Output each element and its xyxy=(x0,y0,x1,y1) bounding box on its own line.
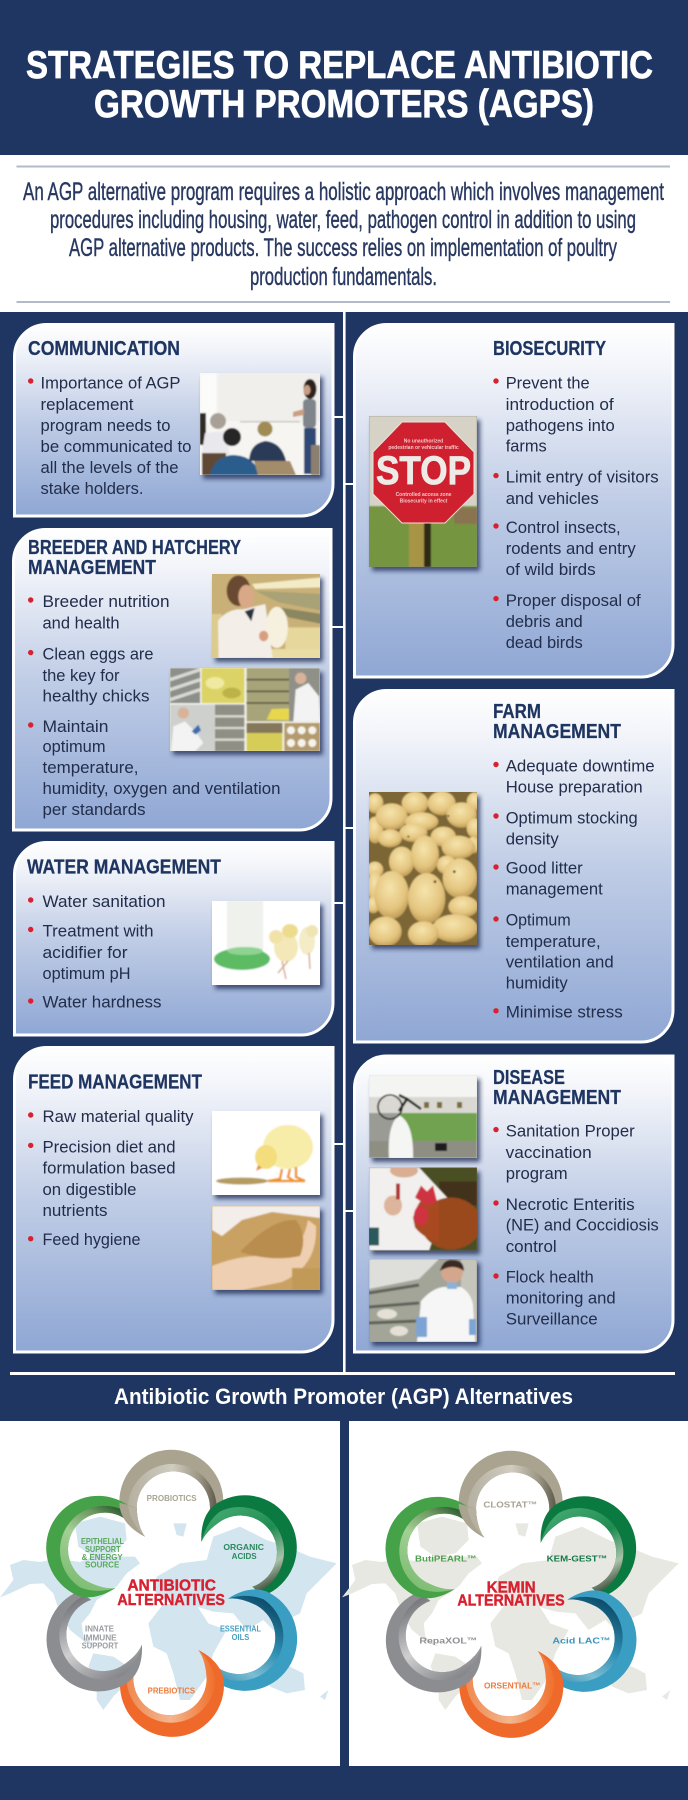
bullet list: biosecurity xyxy=(493,374,659,652)
bullet list: communication: Importance of AGP xyxy=(40,374,180,392)
bullet list: biosecurity: pathogens into xyxy=(506,416,615,435)
label: repaxol: RepaXOL™ xyxy=(419,1635,477,1645)
label: orsential: ORSENTIAL™ xyxy=(484,1681,541,1691)
photo: presenter and audience xyxy=(200,373,320,475)
label: probiotics: PROBIOTICS xyxy=(147,1493,197,1503)
photo: chick eating feed xyxy=(212,1111,320,1195)
label: epithelial support: & ENERGY xyxy=(82,1552,123,1562)
heading: water management: WATER MANAGEMENT xyxy=(27,857,221,879)
panel: communication xyxy=(14,324,333,516)
bullet list: breeder xyxy=(28,592,280,819)
bullet list: farm: Optimum xyxy=(506,911,571,930)
bullet list: farm: House preparation xyxy=(506,777,643,796)
bullet list: disease: Flock health xyxy=(506,1268,594,1286)
bullet list: water: Water hardness xyxy=(42,992,162,1011)
bullet list: water: acidifier for xyxy=(42,943,128,962)
bullet list: feed: on digestible xyxy=(42,1180,136,1199)
label: acid lac: Acid LAC™ xyxy=(552,1635,611,1645)
label: organic acids xyxy=(223,1542,265,1561)
heading: farm management: MANAGEMENT xyxy=(493,721,621,743)
intro paragraph: production fundamentals. xyxy=(250,263,437,291)
header banner xyxy=(0,0,688,155)
panel: feed management xyxy=(14,1048,333,1352)
bullet list: breeder: Breeder nutrition xyxy=(42,592,170,611)
bullet list: breeder: optimum xyxy=(42,737,106,756)
photo: vet with rooster xyxy=(369,1164,481,1250)
bullet list: disease: Necrotic Enteritis xyxy=(506,1195,635,1214)
bullet list: water: Water sanitation xyxy=(42,892,166,911)
photo: hand holding feed xyxy=(212,1206,320,1290)
intro paragraph xyxy=(23,178,664,291)
bullet list: breeder: temperature, xyxy=(42,758,138,777)
label: organic acids: ACIDS xyxy=(232,1551,257,1561)
flower of six crescents xyxy=(366,1451,656,1738)
bullet list: farm: temperature, xyxy=(506,932,601,951)
heading: disease management xyxy=(493,1067,621,1109)
bullet list: communication: stake holders. xyxy=(40,479,144,498)
bullet list: feed: Precision diet and xyxy=(42,1138,176,1157)
label: innate immune support: INNATE xyxy=(85,1624,114,1634)
center label: antibiotic alternatives: ALTERNATIVES xyxy=(117,1592,225,1609)
bullet list: breeder: Clean eggs are xyxy=(42,644,154,664)
bullet list: biosecurity: Limit entry of visitors xyxy=(506,468,659,486)
panel: breeder and hatchery management xyxy=(14,530,331,830)
bullet list: breeder: per standards xyxy=(42,800,146,819)
center label: antibiotic alternatives: ANTIBIOTIC xyxy=(127,1578,216,1595)
label: butipearl: ButiPEARL™ xyxy=(415,1554,477,1564)
heading: farm management xyxy=(493,701,621,743)
bullet list: disease: vaccination xyxy=(506,1143,592,1162)
bullet list: biosecurity: introduction of xyxy=(506,395,614,414)
label: prebiotics: PREBIOTICS xyxy=(148,1685,195,1695)
bullet list: farm: Good litter xyxy=(506,859,583,878)
heading: disease management: DISEASE xyxy=(493,1067,565,1089)
bullet list: disease: program xyxy=(506,1164,568,1183)
photo: sprayer jug on farm xyxy=(369,1075,477,1158)
bullet list: breeder: Maintain xyxy=(42,717,108,736)
bullet list: disease: Surveillance xyxy=(506,1310,598,1328)
label: innate immune support: SUPPORT xyxy=(82,1641,119,1651)
bullet list: communication: program needs to xyxy=(40,416,170,435)
heading: disease management: MANAGEMENT xyxy=(493,1087,621,1109)
photo: crowd of chicks xyxy=(365,790,483,947)
bullet list: disease: (NE) and Coccidiosis xyxy=(506,1216,659,1234)
bullet list: farm xyxy=(493,756,655,1022)
bullet list: breeder: healthy chicks xyxy=(42,686,150,706)
bullet list: breeder: humidity, oxygen and ventilation xyxy=(42,779,280,798)
title xyxy=(26,44,653,126)
world map: blue xyxy=(0,1517,337,1710)
photo: stop sign: No unauthorized xyxy=(404,438,443,444)
photo: stop sign: Controlled access zone xyxy=(396,492,452,498)
bullet list: biosecurity: and vehicles xyxy=(506,489,599,508)
bullet list: water xyxy=(28,892,166,1011)
bullet list: farm: density xyxy=(506,829,559,848)
bullet list: feed: Raw material quality xyxy=(42,1107,194,1126)
heading: breeder and hatchery: MANAGEMENT xyxy=(28,557,156,579)
label: epithelial support xyxy=(81,1536,125,1570)
bullet list: disease: monitoring and xyxy=(506,1288,616,1308)
label: innate immune support: IMMUNE xyxy=(83,1632,117,1642)
photo: stop sign: Biosecurity in effect xyxy=(400,498,448,504)
bullet list: biosecurity: farms xyxy=(506,436,547,456)
label: essential oils: ESSENTIAL xyxy=(220,1624,262,1634)
bullet list: feed: formulation based xyxy=(42,1159,176,1178)
label: epithelial support: SOURCE xyxy=(85,1560,120,1570)
bullet list: communication: be communicated to xyxy=(40,437,192,456)
bullet list: disease: control xyxy=(506,1237,557,1256)
bullet list: water: Treatment with xyxy=(42,921,154,940)
panel: antibiotic alternatives diagram xyxy=(0,1421,340,1766)
bullet list: biosecurity: Proper disposal of xyxy=(506,591,641,610)
bullet list: disease: Sanitation Proper xyxy=(506,1122,635,1140)
label: organic acids: ORGANIC xyxy=(223,1542,265,1552)
heading: farm management: FARM xyxy=(493,701,541,723)
bullet list: farm: ventilation and xyxy=(506,953,614,972)
world map: grey xyxy=(342,1517,679,1710)
panel: farm management xyxy=(354,690,673,1042)
label: epithelial support: EPITHELIAL xyxy=(81,1536,125,1546)
bullet list: biosecurity: Prevent the xyxy=(506,374,590,392)
bullet list: biosecurity: Control insects, xyxy=(506,518,621,537)
bullet list: biosecurity: debris and xyxy=(506,612,583,631)
center label: antibiotic alternatives xyxy=(117,1578,225,1609)
panel: kemin alternatives diagram xyxy=(342,1421,688,1766)
bullet list: farm: management xyxy=(506,880,603,899)
bullet list: water: optimum pH xyxy=(42,964,130,983)
center label: kemin alternatives xyxy=(457,1579,565,1610)
heading: communication: COMMUNICATION xyxy=(28,338,180,360)
bullet list: farm: Optimum stocking xyxy=(506,808,638,827)
bullet list: breeder: and health xyxy=(42,614,120,632)
title: GROWTH PROMOTERS (AGPS) xyxy=(94,83,594,126)
bullet list: farm: Minimise stress xyxy=(506,1003,623,1022)
photo: vet in poultry house xyxy=(369,1259,477,1342)
bullet list: biosecurity: rodents and entry xyxy=(506,539,636,558)
label: essential oils xyxy=(220,1624,262,1642)
label: kem-gest: KEM-GEST™ xyxy=(547,1554,607,1564)
photo: stop sign xyxy=(369,416,477,567)
center label: kemin alternatives: ALTERNATIVES xyxy=(457,1593,565,1610)
label: epithelial support: SUPPORT xyxy=(85,1544,121,1554)
central divider and connectors xyxy=(332,312,354,1374)
bullet list: feed: nutrients xyxy=(42,1201,108,1220)
bullet list: disease xyxy=(493,1122,659,1328)
label: essential oils: OILS xyxy=(232,1632,250,1642)
heading: breeder and hatchery xyxy=(28,537,242,579)
flower of six crescents xyxy=(27,1450,316,1737)
heading: feed management: FEED MANAGEMENT xyxy=(28,1072,202,1094)
center label: kemin alternatives: KEMIN xyxy=(487,1579,536,1596)
bullet list: communication xyxy=(28,374,192,498)
label: innate immune support xyxy=(82,1624,119,1651)
panel: water management xyxy=(14,842,333,1035)
bullet list: communication: all the levels of the xyxy=(40,458,178,477)
panel: disease management xyxy=(354,1056,673,1352)
bullet list: communication: replacement xyxy=(40,395,134,414)
heading: biosecurity: BIOSECURITY xyxy=(493,338,607,360)
bullet list: farm: humidity xyxy=(506,974,568,993)
bullet list: feed xyxy=(28,1107,194,1249)
photo: stop sign: pedestrian or vehicular traffic xyxy=(388,445,459,451)
section divider rule xyxy=(10,1372,675,1375)
photo: hatchery collage xyxy=(170,668,320,751)
bullet list: biosecurity: of wild birds xyxy=(506,560,596,579)
photo: breeder farmer holding hen xyxy=(209,571,324,661)
label: clostat: CLOSTAT™ xyxy=(483,1500,537,1510)
photo: water drinker with chicks xyxy=(212,901,320,985)
bullet list: breeder: the key for xyxy=(42,666,120,685)
bullet list: biosecurity: dead birds xyxy=(506,633,583,652)
section heading: AGP alternatives: Antibiotic Growth Promoter (AGP) Alternatives xyxy=(114,1384,573,1409)
bullet list: feed: Feed hygiene xyxy=(42,1230,140,1249)
bullet list: farm: Adequate downtime xyxy=(506,756,655,775)
heading: breeder and hatchery: BREEDER AND HATCHERY xyxy=(28,537,242,559)
panel: biosecurity xyxy=(354,324,673,677)
